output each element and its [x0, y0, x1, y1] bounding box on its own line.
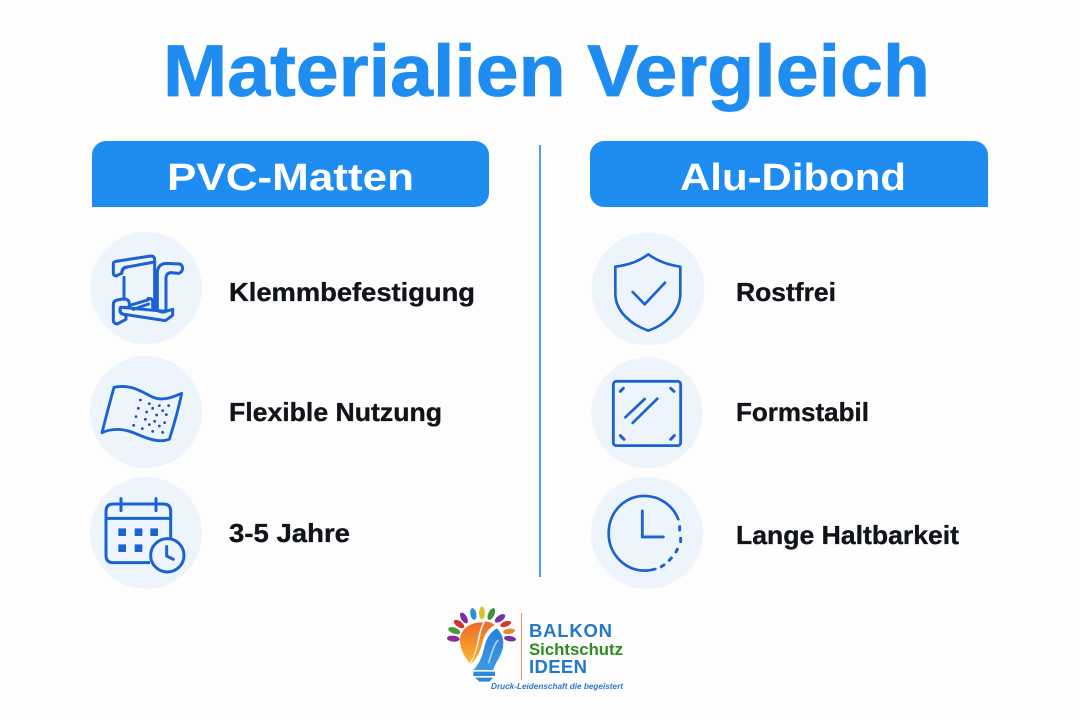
text: Rostfrei: Rostfrei: [736, 277, 836, 307]
title: Materialien Vergleich: [163, 31, 930, 112]
text: Lange Haltbarkeit: Lange Haltbarkeit: [736, 520, 959, 550]
text: Flexible Nutzung: Flexible Nutzung: [229, 397, 442, 427]
text: Formstabil: Formstabil: [736, 397, 869, 427]
text: 3-5 Jahre: 3-5 Jahre: [229, 518, 350, 548]
panel: PVC-Matten header: PVC-Matten: [167, 157, 414, 199]
text: Sichtschutz: Sichtschutz: [529, 640, 623, 659]
logo: [447, 607, 624, 691]
icon: calendar with clock: [90, 477, 202, 589]
icon: flexible mat: [90, 356, 202, 468]
panel: PVC-Matten header: [92, 141, 489, 207]
text: BALKON: BALKON: [529, 620, 612, 641]
text: tagline: Druck-Leidenschaft die begeistert: [491, 681, 624, 691]
panel: Alu-Dibond header: [590, 141, 988, 207]
icon: rigid panel: [592, 358, 702, 468]
panel: Alu-Dibond header: Alu-Dibond: [680, 157, 906, 199]
icon: clamp mount: [90, 232, 202, 344]
text: Klemmbefestigung: Klemmbefestigung: [229, 277, 475, 307]
text: IDEEN: IDEEN: [529, 656, 587, 677]
icon: colourful light bulb: [447, 607, 516, 682]
icon: shield check: [592, 232, 704, 346]
icon: clock: [591, 477, 703, 589]
